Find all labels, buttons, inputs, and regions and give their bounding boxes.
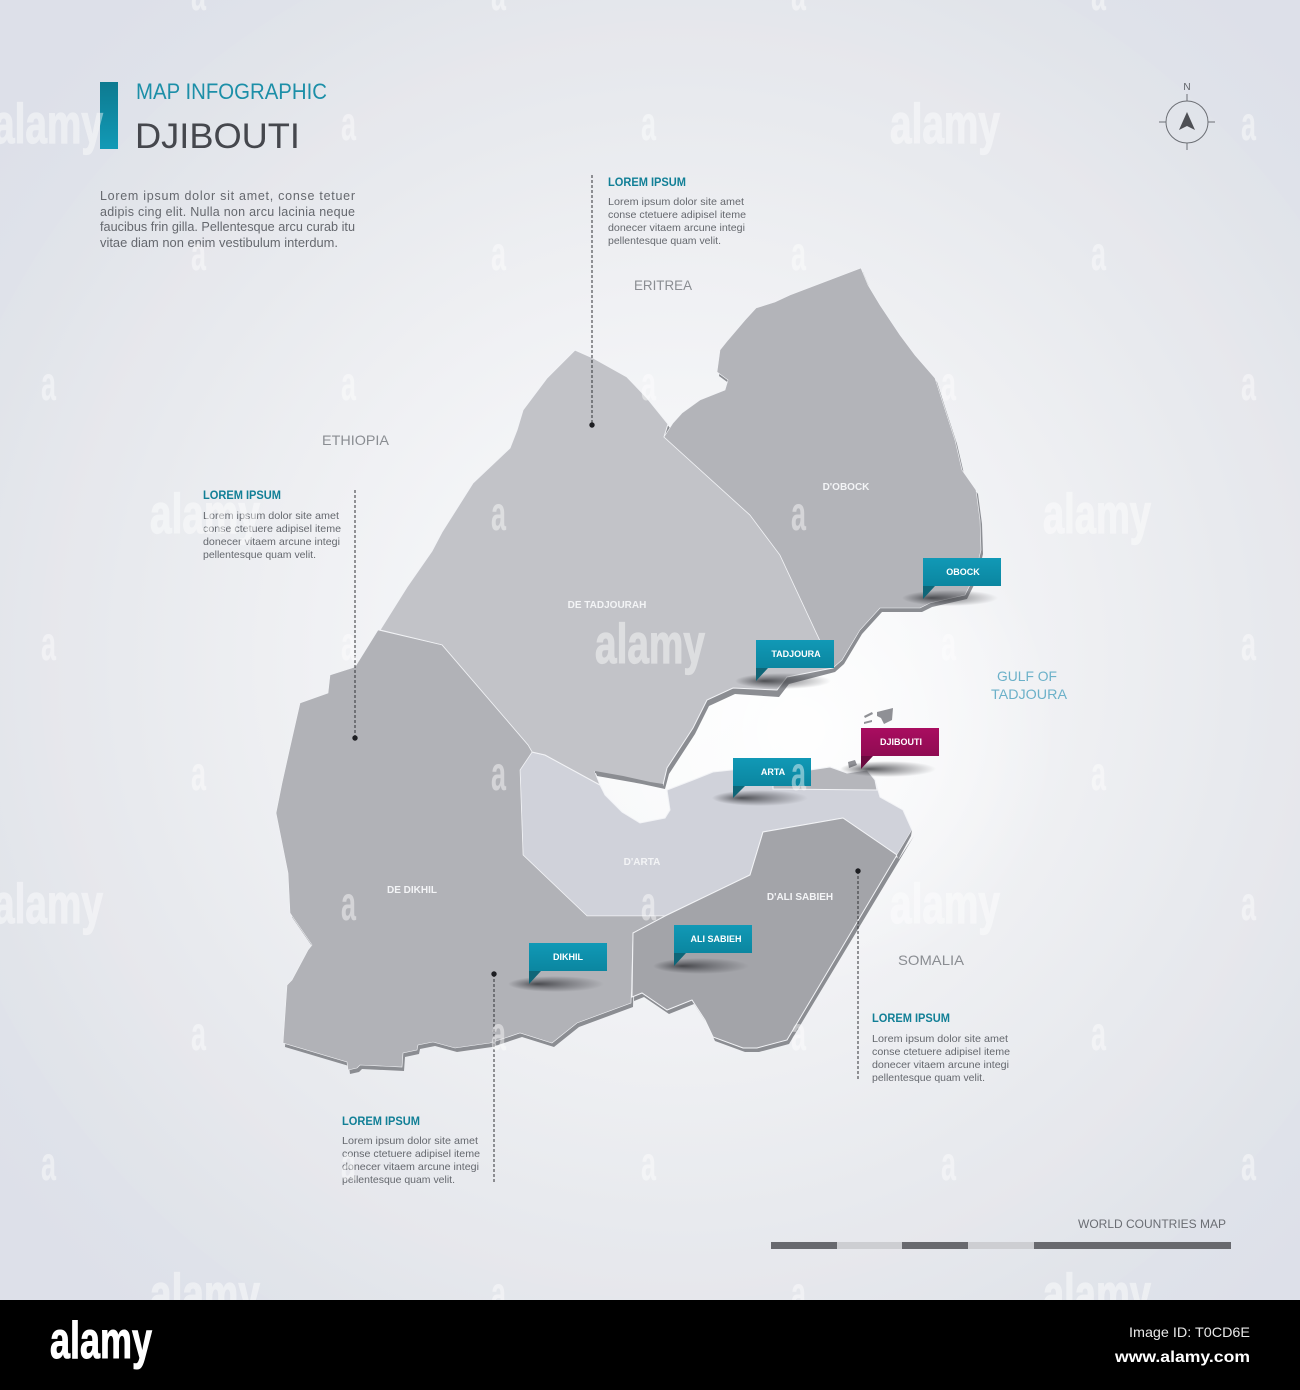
Arta SE sliver edge	[897, 830, 912, 860]
watermarks: a	[341, 1138, 356, 1191]
watermarks: a	[641, 878, 656, 931]
3D map side	[278, 272, 983, 1074]
callout: south: LOREM IPSUM	[342, 1114, 420, 1128]
flag: Arta	[712, 758, 811, 806]
region: D'Ali Sabieh	[632, 818, 897, 1048]
watermarks: alamy	[595, 612, 705, 675]
compass: N	[1183, 82, 1191, 93]
region: D'Obock	[664, 268, 981, 668]
watermarks: a	[341, 878, 356, 931]
Gulf of Tadjoura label: TADJOURA	[991, 686, 1068, 702]
watermarks: alamy	[150, 482, 260, 545]
callout: west: donecer vitaem arcune integi	[203, 536, 340, 548]
flag: Tadjoura: TADJOURA	[771, 649, 821, 659]
watermarks: a	[491, 1008, 506, 1061]
callout: west	[203, 488, 358, 741]
watermarks: a	[491, 748, 506, 801]
callout: east: conse ctetuere adipisel iteme	[872, 1046, 1010, 1058]
watermarks: alamy	[1043, 1262, 1151, 1325]
footer image id: Image ID: T0CD6E	[1129, 1324, 1250, 1340]
watermarks: a	[1241, 358, 1256, 411]
watermarks: a	[791, 1268, 806, 1321]
watermarks: a	[491, 488, 506, 541]
watermarks: alamy	[150, 1262, 260, 1325]
watermarks: a	[641, 358, 656, 411]
intro paragraph: faucibus frin gilla. Pellentesque arcu curab itu	[100, 220, 355, 234]
compass	[1159, 82, 1215, 150]
scale bar label: WORLD COUNTRIES MAP	[1078, 1217, 1226, 1231]
intro paragraph: Lorem ipsum dolor sit amet, conse tetuer	[100, 189, 355, 203]
callout: south	[342, 971, 497, 1186]
watermarks: a	[941, 618, 956, 671]
callout: north: LOREM IPSUM	[608, 175, 686, 189]
watermarks: a	[341, 358, 356, 411]
neighbouring country labels: ETHIOPIA	[322, 432, 390, 448]
callout: north: donecer vitaem arcune integi	[608, 222, 745, 234]
watermarks: alamy	[890, 872, 1000, 935]
watermarks: a	[791, 228, 806, 281]
intro paragraph	[100, 189, 355, 250]
watermarks: a	[1091, 228, 1106, 281]
callout: east: LOREM IPSUM	[872, 1011, 950, 1025]
flag: Arta: ARTA	[761, 767, 786, 777]
watermarks: a	[791, 488, 806, 541]
watermarks: a	[941, 358, 956, 411]
flag: Obock	[902, 558, 1001, 606]
callout: south: pellentesque quam velit.	[342, 1174, 455, 1186]
Gulf of Tadjoura label	[991, 668, 1068, 702]
watermarks: a	[641, 98, 656, 151]
callout: south: donecer vitaem arcune integi	[342, 1161, 479, 1173]
intro paragraph: adipis cing elit. Nulla non arcu lacinia neque	[100, 205, 355, 219]
title: DJIBOUTI	[135, 117, 300, 156]
region labels: DE TADJOURAH	[568, 600, 646, 611]
Musha islands	[848, 708, 893, 768]
callout: north	[589, 175, 746, 428]
callout: west: conse ctetuere adipisel iteme	[203, 523, 341, 535]
map of Djibouti	[276, 268, 983, 1074]
watermarks: a	[491, 1268, 506, 1321]
title accent bar	[100, 82, 118, 149]
watermarks: a	[191, 1008, 206, 1061]
callout: south: conse ctetuere adipisel iteme	[342, 1148, 480, 1160]
watermarks: alamy	[1043, 482, 1151, 545]
watermarks: a	[341, 98, 356, 151]
callout: south: Lorem ipsum dolor site amet	[342, 1135, 478, 1147]
watermarks: a	[1241, 1138, 1256, 1191]
watermarks: a	[791, 748, 806, 801]
flag: Ali Sabieh: ALI SABIEH	[690, 934, 742, 944]
flag: Tadjoura	[735, 640, 834, 689]
Djibouti city region	[773, 767, 877, 790]
region: D'Arta	[520, 752, 912, 916]
region: De Tadjourah	[380, 350, 833, 785]
callout: east: pellentesque quam velit.	[872, 1072, 985, 1084]
watermarks: a	[41, 358, 56, 411]
footer url: www.alamy.com	[1114, 1349, 1250, 1366]
flag: Dikhil: DIKHIL	[553, 952, 583, 962]
neighbouring country labels	[322, 277, 965, 968]
footer band	[0, 1300, 1300, 1390]
Gulf of Tadjoura label: GULF OF	[997, 668, 1057, 684]
callout: east: Lorem ipsum dolor site amet	[872, 1033, 1008, 1045]
callout: north: conse ctetuere adipisel iteme	[608, 209, 746, 221]
watermarks: alamy	[890, 92, 1000, 155]
watermarks: a	[1241, 98, 1256, 151]
intro paragraph: vitae diam non enim vestibulum interdum.	[100, 236, 338, 250]
watermarks: a	[41, 618, 56, 671]
watermarks: a	[191, 228, 206, 281]
watermarks: a	[791, 1008, 806, 1061]
footer logo: alamy	[50, 1312, 152, 1370]
region labels: D'OBOCK	[823, 482, 870, 493]
watermarks: a	[641, 1138, 656, 1191]
watermarks: a	[1091, 748, 1106, 801]
region labels: D'ARTA	[624, 857, 660, 868]
watermarks: a	[941, 1138, 956, 1191]
watermarks: a	[1241, 618, 1256, 671]
watermarks: a	[191, 748, 206, 801]
title kicker: MAP INFOGRAPHIC	[136, 79, 327, 104]
region labels: D'ALI SABIEH	[767, 892, 833, 903]
callout: west: pellentesque quam velit.	[203, 549, 316, 561]
region labels: DE DIKHIL	[387, 885, 437, 896]
watermarks: a	[491, 228, 506, 281]
region labels	[387, 482, 870, 903]
callout: east: donecer vitaem arcune integi	[872, 1059, 1009, 1071]
flag: Obock: OBOCK	[946, 567, 980, 577]
watermarks: a	[1091, 1008, 1106, 1061]
flag: Djibouti capital	[840, 728, 939, 777]
flag: Ali Sabieh	[653, 925, 752, 974]
region: De Dikhil	[276, 630, 665, 1070]
coast dark rim around Tadjoura gulf	[595, 772, 663, 785]
scale bar	[771, 1242, 1231, 1249]
flag: Djibouti capital: DJIBOUTI	[880, 737, 922, 747]
neighbouring country labels: SOMALIA	[898, 952, 965, 968]
watermarks: a	[41, 1138, 56, 1191]
callout: west: Lorem ipsum dolor site amet	[203, 510, 339, 522]
flag: Dikhil	[508, 943, 607, 992]
callout: north: pellentesque quam velit.	[608, 235, 721, 247]
callout: north: Lorem ipsum dolor site amet	[608, 196, 744, 208]
watermarks: a	[1241, 878, 1256, 931]
callout: west: LOREM IPSUM	[203, 488, 281, 502]
neighbouring country labels: ERITREA	[634, 277, 693, 293]
callout: east	[855, 868, 1010, 1084]
watermarks: a	[341, 618, 356, 671]
